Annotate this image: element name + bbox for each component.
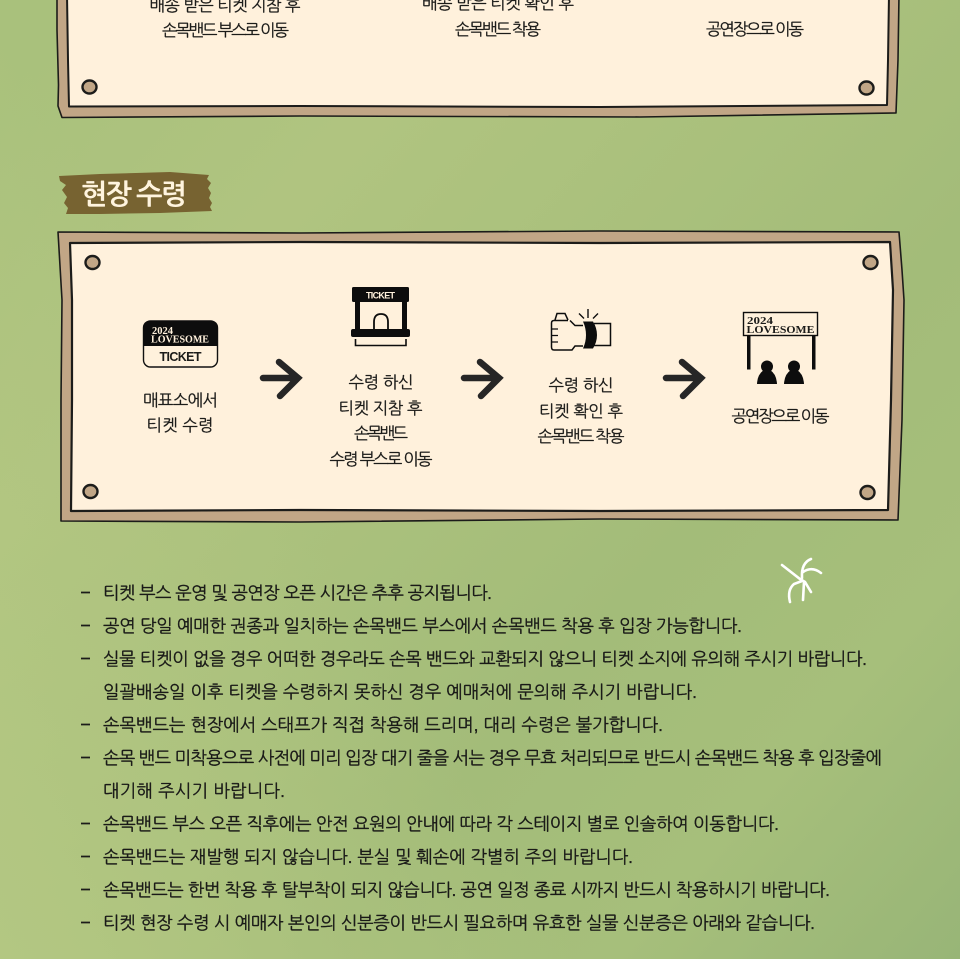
icon: ticket booth (351, 287, 410, 346)
notice list: 손목밴드는 한번 착용 후 탈부착이 되지 않습니다. 공연 일정 종료 시까지 반드시 착용하시기 바랍니다. (103, 880, 830, 900)
icon: venue sign with people: LOVESOME (746, 325, 814, 336)
notice list: 일괄배송일 이후 티켓을 수령하지 못하신 경우 예매처에 문의해 주시기 바랍니다. (103, 682, 697, 702)
notice list: 티켓 현장 수령 시 예매자 본인의 신분증이 반드시 필요하며 유효한 실물 신분증은 아래와 같습니다. (103, 913, 815, 933)
icon: venue sign with people (744, 312, 818, 384)
heading: on-site pickup: 현장 수령 (81, 179, 187, 210)
text: step 2 upper (422, 0, 574, 39)
text: step 2 lower: 티켓 지참 후 (338, 400, 423, 418)
text: step 3 lower: 티켓 확인 후 (539, 403, 623, 421)
icon: ticket (143, 321, 218, 367)
icon: white sprout decoration (782, 559, 821, 602)
text: step 4 lower: 공연장으로 이동 (732, 408, 830, 426)
notice list: 티켓 부스 운영 및 공연장 오픈 시간은 추후 공지됩니다. (103, 583, 492, 603)
panel: upper wooden frame (57, 0, 899, 118)
icon: wristband on fist (552, 309, 610, 350)
text: step 1 lower: 티켓 수령 (146, 417, 214, 435)
text: step 1 upper: 손목밴드 부스로 이동 (162, 22, 289, 40)
icon: ticket booth: TICKET (366, 290, 396, 300)
icon: ticket: LOVESOME (151, 334, 209, 346)
arrow 2 (464, 362, 499, 396)
notice list: 손목밴드 부스 오픈 직후에는 안전 요원의 안내에 따라 각 스테이지 별로 인솔하여 이동합니다. (103, 814, 779, 834)
text: step 3 lower: 손목밴드 착용 (538, 428, 625, 446)
arrow 1 (263, 362, 298, 396)
notice list: 대기해 주시기 바랍니다. (103, 781, 285, 801)
icon: venue sign with people: 2024 (747, 315, 774, 327)
icon: ticket: TICKET (160, 350, 202, 364)
text: step 2 lower: 수령 부스로 이동 (330, 451, 433, 469)
text: step 2 lower: 손목밴드 (354, 425, 408, 443)
notice list (81, 583, 882, 933)
lower frame nails (84, 256, 878, 499)
notice list: 손목밴드는 재발행 되지 않습니다. 분실 및 훼손에 각별히 주의 바랍니다. (103, 847, 633, 867)
notice list: 공연 당일 예매한 권종과 일치하는 손목밴드 부스에서 손목밴드 착용 후 입장 가능합니다. (103, 616, 742, 636)
notice list: 손목 밴드 미착용으로 사전에 미리 입장 대기 줄을 서는 경우 무효 처리되므로 반드시 손목밴드 착용 후 입장줄에 (103, 748, 882, 768)
text: step 2 upper: 손목밴드 착용 (455, 21, 541, 39)
text: step 3 lower (538, 377, 625, 446)
text: step 3 lower: 수령 하신 (548, 377, 614, 395)
text: step 2 lower (330, 374, 433, 469)
text: step 1 lower: 매표소에서 (143, 392, 218, 410)
notice list: 실물 티켓이 없을 경우 어떠한 경우라도 손목 밴드와 교환되지 않으니 티켓 소지에 유의해 주시기 바랍니다. (103, 649, 867, 669)
text: step 2 lower: 수령 하신 (348, 374, 414, 392)
upper frame nails (82, 80, 874, 94)
text: step 1 upper (150, 0, 301, 40)
heading: on-site pickup (59, 172, 212, 214)
panel: lower wooden frame (58, 231, 904, 522)
arrow 3 (666, 362, 701, 396)
text: step 3 upper: 공연장으로 이동 (706, 21, 804, 39)
icon: ticket: 2024 (152, 326, 173, 337)
text: step 1 lower (143, 392, 218, 435)
notice list: 손목밴드는 현장에서 스태프가 직접 착용해 드리며, 대리 수령은 불가합니다. (103, 715, 663, 735)
